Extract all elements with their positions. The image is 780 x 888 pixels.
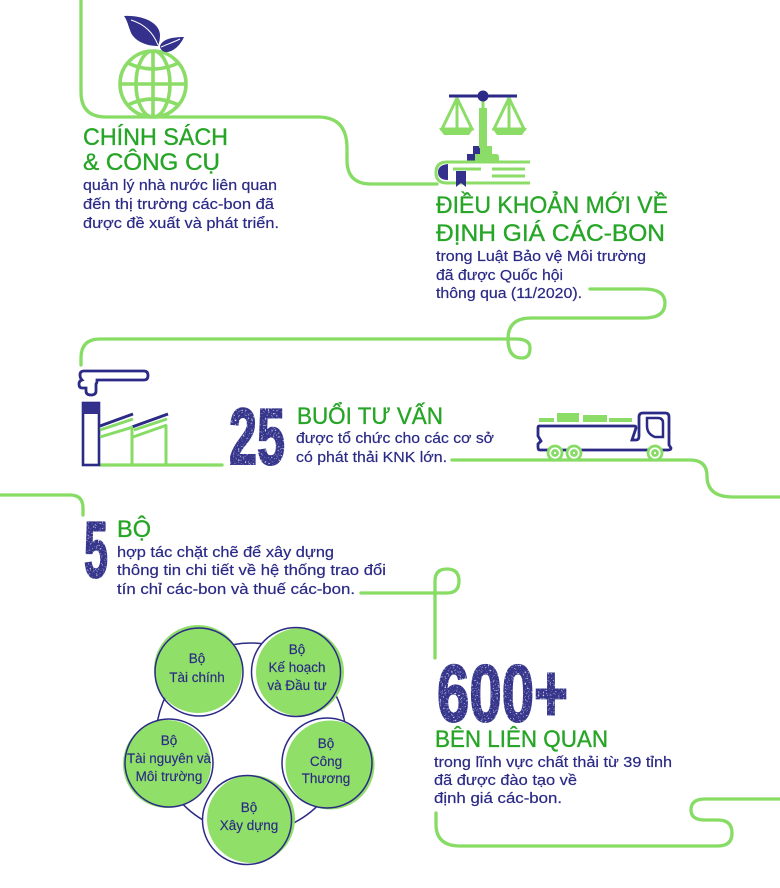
- circle: Ministry of Planning and Investment: [251, 627, 344, 717]
- text block: được tổ chức cho các cơ sở: [296, 431, 495, 447]
- number: 5: 5: [84, 505, 108, 594]
- text block: có phát thải KNK lớn.: [296, 450, 447, 466]
- text block: định giá các-bon.: [434, 791, 562, 807]
- number: 25: 25: [229, 392, 285, 481]
- heading: & CÔNG CỤ: [83, 148, 220, 176]
- heading: ĐIỀU KHOẢN MỚI VỀ: [436, 190, 668, 219]
- panel: new carbon pricing provisions: [436, 190, 668, 302]
- circle: Ministry of Construction: [202, 775, 295, 865]
- panel: policies and tools: [83, 124, 279, 232]
- text block: hợp tác chặt chẽ để xây dựng: [117, 545, 334, 561]
- panel: five ministries: [117, 515, 386, 598]
- connector line: bottom right: [436, 799, 780, 846]
- circle: Ministry of Industry and Trade: [282, 718, 374, 810]
- heading: [436, 190, 668, 247]
- heading: ĐỊNH GIÁ CÁC-BON: [436, 220, 665, 247]
- heading: BỘ: [117, 515, 151, 543]
- text block: trong Luật Bảo vệ Môi trường: [436, 249, 646, 265]
- connector line: loop from second text to factory: [81, 289, 665, 365]
- text block: quản lý nhà nước liên quan: [83, 178, 277, 194]
- text block: được đề xuất và phát triển.: [83, 216, 279, 232]
- connector line: top left to book: [81, 0, 437, 184]
- number: 600+: 600+: [437, 649, 568, 739]
- text block: tín chỉ các-bon và thuế các-bon.: [117, 582, 355, 598]
- text block: [434, 755, 672, 807]
- circle: Ministry of Finance: Bộ: [189, 651, 205, 666]
- heading: CHÍNH SÁCH: [83, 124, 228, 151]
- text block: đã được Quốc hội: [436, 268, 563, 284]
- icon: scales on book: [436, 90, 530, 187]
- circle: Ministry of Construction: Bộ: [241, 800, 257, 815]
- circle: Ministry of Natural Resources and Environment: Môi trường: [136, 769, 202, 784]
- text block: [83, 178, 279, 232]
- text block: thông tin chi tiết về hệ thống trao đổi: [117, 563, 386, 579]
- connector line: truck road: [452, 460, 780, 497]
- panel: stakeholders: [434, 726, 672, 807]
- connector line: factory base: [100, 463, 222, 467]
- text block: [296, 431, 495, 466]
- circle: Ministry of Planning and Investment: Bộ: [289, 642, 305, 657]
- text block: [436, 249, 646, 302]
- circle: Ministry of Planning and Investment: và Đầu tư: [267, 678, 327, 693]
- panel: consultations: [296, 402, 495, 466]
- heading: BÊN LIÊN QUAN: [435, 726, 608, 753]
- icon: globe with leaves: [118, 16, 188, 118]
- icon: factory: [79, 371, 168, 465]
- text block: trong lĩnh vực chất thải từ 39 tỉnh: [434, 755, 672, 771]
- circle: Ministry of Finance: Tài chính: [169, 670, 225, 685]
- circle: Ministry of Natural Resources and Environment: Bộ: [161, 733, 177, 748]
- text block: đến thị trường các-bon đã: [83, 197, 275, 213]
- heading: BUỔI TƯ VẤN: [297, 402, 443, 430]
- circle: Ministry of Natural Resources and Environment: [123, 719, 213, 808]
- circle: Ministry of Industry and Trade: Thương: [302, 771, 350, 786]
- icon: truck: [538, 413, 671, 460]
- circle: Ministry of Industry and Trade: Công: [310, 754, 342, 769]
- circle: Ministry of Industry and Trade: Bộ: [318, 736, 334, 751]
- text block: [117, 545, 386, 598]
- circle: Ministry of Planning and Investment: Kế hoạch: [268, 660, 326, 675]
- connector line: loop to 600 plus: [361, 569, 459, 658]
- heading: [83, 124, 228, 176]
- connector line: left edge to number five: [0, 495, 83, 515]
- diagram: ministries cycle: [123, 625, 374, 865]
- circle: Ministry of Construction: Xây dựng: [220, 818, 278, 833]
- text block: thông qua (11/2020).: [436, 286, 582, 302]
- text block: đã được đào tạo về: [434, 773, 577, 789]
- circle: Ministry of Finance: [154, 625, 243, 716]
- circle: Ministry of Natural Resources and Environment: Tài nguyên và: [127, 751, 211, 766]
